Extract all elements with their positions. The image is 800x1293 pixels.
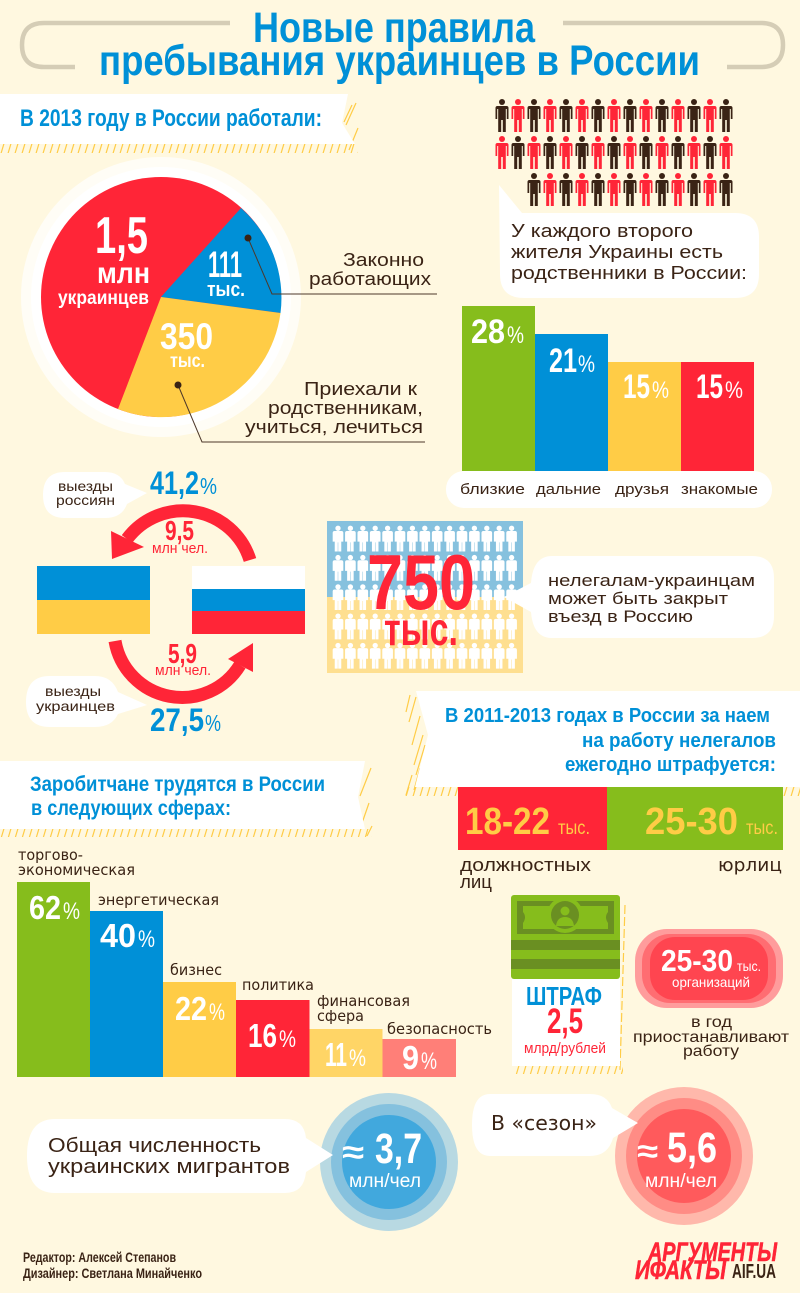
speech bubble: every second resident: У каждого второго — [511, 221, 693, 241]
circle: seasonal migrants — [615, 1087, 753, 1225]
speech bubble: Ukrainian departures: выезды — [45, 683, 101, 699]
sector: trade: торгово- — [18, 846, 83, 864]
pie label: 1.5 million: 1,5 — [95, 207, 148, 265]
bar: 21% — [535, 334, 608, 471]
pie label: 1.5 million: млн — [97, 257, 150, 290]
logo: ИФАКТЫ — [635, 1255, 727, 1285]
circle: total migrants: ≈ — [342, 1134, 364, 1170]
bar: 15% yellow: % — [652, 377, 669, 404]
pie label: 350 — [160, 316, 213, 372]
pie label: 111 — [207, 244, 245, 301]
sector: energy — [90, 891, 219, 1077]
badge: organizations suspended: организаций — [672, 974, 750, 990]
stat: 9.5 million: млн чел. — [152, 540, 208, 557]
label pill: близкие — [460, 481, 525, 498]
sector: security: 9 — [402, 1039, 419, 1076]
sector: energy: 40 — [100, 917, 136, 954]
pie label: 1.5 million: украинцев — [58, 288, 149, 309]
logo: AIF.UA — [732, 1261, 776, 1283]
pie label: 111: тыс. — [207, 279, 245, 301]
pie label: 1.5 million — [58, 207, 150, 309]
speech bubble: Ukrainian departures: украинцев — [36, 698, 115, 714]
logo — [635, 1237, 778, 1285]
title: Новые правила — [253, 4, 536, 52]
stat: 5.9 million: млн чел. — [155, 662, 211, 679]
credits: Дизайнер: Светлана Минайченко — [23, 1265, 202, 1281]
stat: 27.5%: % — [205, 710, 221, 736]
callout text: legal workers: Законно — [343, 250, 424, 270]
stat: 41.2%: % — [200, 473, 217, 499]
people pictogram — [496, 99, 732, 206]
heading ribbon: fines — [405, 691, 800, 796]
speech bubble: total migrants: украинских мигрантов — [48, 1156, 290, 1178]
sector: politics: 16 — [248, 1017, 277, 1054]
callout text: relatives: Приехали к — [304, 379, 417, 399]
panel: fine receipt: ШТРАФ — [526, 981, 602, 1011]
sector: security: безопасность — [387, 1020, 492, 1038]
credits — [23, 1249, 202, 1281]
callout text: relatives — [245, 379, 423, 437]
stat: 41.2%: 41,2 — [150, 465, 199, 501]
sector: trade: экономическая — [18, 861, 135, 879]
circle: seasonal migrants: ≈ — [637, 1133, 658, 1169]
white people grid — [333, 526, 517, 668]
label pill: друзья — [615, 481, 669, 498]
speech bubble: every second resident — [499, 185, 759, 298]
sector: trade — [17, 846, 135, 1077]
sector: security — [382, 1020, 492, 1077]
circle: seasonal migrants: 5,6 — [667, 1124, 717, 1172]
stat: 5.9 million: 5,9 — [168, 638, 197, 669]
circle: total migrants — [320, 1093, 458, 1231]
speech bubble: entry ban: въезд в Россию — [548, 608, 693, 626]
bar: 15% red — [681, 362, 754, 471]
bar: 15% yellow: 15 — [623, 368, 650, 406]
sector: politics — [236, 976, 314, 1077]
callout text: relatives: родственникам, — [268, 398, 423, 418]
sector: trade: % — [63, 898, 80, 925]
bar: 28% — [462, 306, 535, 471]
sector: politics: политика — [242, 976, 314, 994]
speech bubble: entry ban — [504, 556, 774, 638]
speech bubble: Russian departures — [43, 472, 147, 518]
heading ribbon: 2013 — [0, 94, 358, 153]
sector: business: бизнес — [170, 961, 222, 979]
title: пребывания украинцев в России — [99, 37, 700, 85]
circle: seasonal migrants: млн/чел — [645, 1171, 717, 1192]
sector: business: 22 — [175, 990, 207, 1027]
fine label: officials: должностных — [460, 855, 591, 875]
fine label: officials: лиц — [460, 872, 492, 892]
speech bubble: Russian departures: выезды — [58, 478, 113, 494]
number: 750: 750 — [367, 538, 475, 626]
sector: energy: % — [138, 926, 155, 953]
heading ribbon: fines: В 2011-2013 годах в России за наем — [445, 705, 770, 727]
bar chart: sectors — [17, 846, 492, 1077]
bar: 28%: % — [507, 322, 524, 349]
badge: organizations suspended: тыс. — [737, 958, 761, 974]
circle: total migrants: млн/чел — [349, 1171, 421, 1192]
heading ribbon: sectors: Заробитчане трудятся в России — [30, 773, 325, 796]
arrow: Ukraine to Russia — [115, 641, 253, 697]
pie slice: legally employed — [161, 208, 281, 313]
pie slice: relatives and study — [118, 297, 280, 417]
stat: 9.5 million — [152, 515, 208, 557]
speech bubble: season — [472, 1094, 638, 1156]
speech bubble: Russian departures: россиян — [56, 492, 115, 508]
fine label: legal entities: юрлиц — [718, 855, 782, 876]
bar chart: relatives — [446, 306, 772, 508]
sector: business — [163, 961, 236, 1077]
title brackets — [22, 23, 783, 67]
flag: Russia — [192, 566, 305, 634]
sector: finance: % — [349, 1045, 366, 1072]
heading ribbon: fines: на работу нелегалов — [582, 730, 776, 752]
sector: trade: 62 — [29, 889, 61, 926]
speech bubble: every second resident: родственники в России: — [511, 263, 747, 283]
unit: thousand: тыс. — [384, 603, 458, 655]
sector: energy: энергетическая — [98, 891, 219, 909]
speech bubble: total migrants: Общая численность — [48, 1135, 261, 1157]
sector: business: % — [209, 999, 225, 1026]
title — [99, 4, 700, 85]
fine label: officials — [460, 855, 591, 892]
flag: Ukraine — [37, 566, 150, 634]
sector: finance: финансовая — [317, 992, 410, 1010]
pie label: 350: 350 — [160, 316, 213, 357]
label pill: знакомые — [681, 481, 758, 498]
sector: finance: 11 — [325, 1036, 347, 1073]
speech bubble: Ukrainian departures — [26, 676, 147, 727]
speech bubble: entry ban: нелегалам-украинцам — [548, 572, 755, 590]
heading ribbon: fines: ежегодно штрафуется: — [565, 754, 776, 776]
icon: banknote stack — [511, 895, 620, 979]
bar: 15% red: 15 — [696, 368, 723, 406]
bar: 28%: 28 — [471, 313, 505, 351]
pie chart — [21, 157, 301, 437]
stat: 5.9 million — [155, 638, 211, 679]
fine bar: officials: тыс. — [558, 818, 590, 839]
heading ribbon: sectors — [0, 761, 372, 837]
stat: 9.5 million: 9,5 — [165, 515, 194, 546]
text: suspend work: приостанавливают — [633, 1029, 790, 1046]
speech bubble: season: В «сезон» — [491, 1111, 597, 1135]
heading ribbon: 2013: В 2013 году в России работали: — [20, 105, 322, 132]
text: suspend work — [633, 1014, 790, 1060]
badge: organizations suspended — [635, 929, 783, 1008]
callout text: legal workers — [309, 250, 431, 289]
fine bar: officials: 18-22 — [465, 801, 550, 843]
sector: politics: % — [279, 1026, 296, 1053]
circle: total migrants: 3,7 — [375, 1125, 422, 1173]
fine bar: legal entities: 25-30 — [645, 801, 738, 843]
speech bubble: every second resident: жителя Украины есть — [511, 242, 723, 262]
badge: organizations suspended: 25-30 — [661, 943, 733, 978]
callout text: legal workers: работающих — [309, 269, 431, 289]
credits: Редактор: Алексей Степанов — [23, 1249, 176, 1265]
bar: 15% red: % — [725, 377, 743, 404]
text: suspend work: в год — [691, 1014, 733, 1031]
fine bar: legal entities: тыс. — [746, 818, 778, 839]
panel: fine receipt — [511, 895, 625, 1074]
callout line: legal workers — [244, 234, 437, 294]
panel: 750 thousand — [327, 521, 523, 673]
callout line: relatives — [174, 382, 425, 442]
sector: finance — [310, 992, 410, 1077]
heading ribbon: sectors: в следующих сферах: — [31, 797, 231, 820]
pie label: 111: 111 — [208, 244, 242, 285]
bar: 21%: % — [578, 351, 595, 378]
label pill: дальние — [536, 481, 601, 498]
stat: 27.5%: 27,5 — [150, 702, 204, 738]
panel: fine receipt: млрд/рублей — [524, 1040, 606, 1057]
fine bar: legal entities — [607, 787, 783, 850]
fine bar: officials — [458, 787, 607, 850]
text: suspend work: работу — [683, 1043, 739, 1060]
bar: 15% yellow — [608, 362, 681, 471]
speech bubble: total migrants — [27, 1119, 333, 1193]
speech bubble: entry ban: может быть закрыт — [548, 590, 729, 608]
arrow: Russia to Ukraine — [111, 511, 250, 560]
bar: 21%: 21 — [549, 342, 577, 380]
sector: security: % — [421, 1048, 437, 1075]
sector: finance: сфера — [317, 1007, 364, 1025]
panel: fine receipt: 2,5 — [547, 1002, 583, 1041]
callout text: relatives: учиться, лечиться — [245, 417, 423, 437]
label pill — [446, 471, 772, 508]
pie label: 350: тыс. — [170, 351, 205, 372]
